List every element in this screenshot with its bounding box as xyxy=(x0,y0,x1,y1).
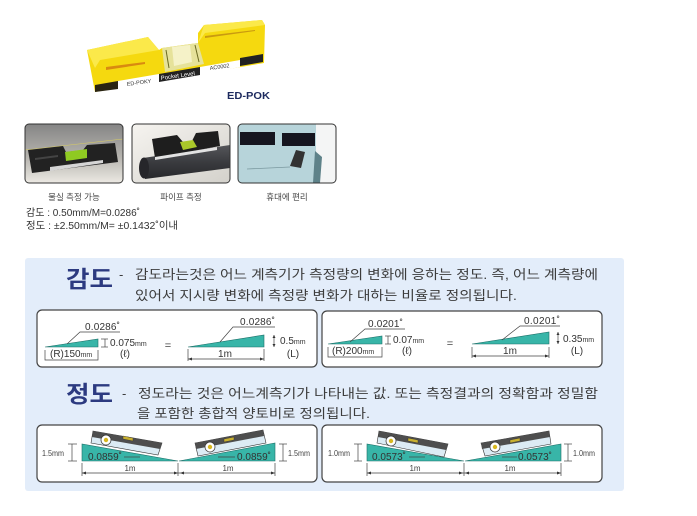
diagram: sensitivity 0.0286: 1m xyxy=(218,349,232,360)
diagram: sensitivity 0.0286: 0.0286˚ xyxy=(85,321,120,333)
diagram: sensitivity 0.0201: 0.35mm xyxy=(563,334,594,345)
diagram: sensitivity 0.0201: 0.07mm xyxy=(393,335,424,346)
photo caption: portable: 휴대에 편리 xyxy=(266,192,308,202)
spec: sensitivity: 감도 : 0.50mm/M=0.0286˚ xyxy=(26,207,140,219)
photo caption: pipe: 파이프 측정 xyxy=(160,192,202,202)
diagram: sensitivity 0.0286: (R)150mm xyxy=(50,349,92,360)
spec: accuracy: 정도 : ±2.50mm/M= ±0.1432˚이내 xyxy=(26,220,178,232)
diagram: sensitivity 0.0201: 0.0201˚ xyxy=(524,315,560,327)
diagram: accuracy 1.5mm: 1m xyxy=(222,464,234,473)
photo: carried in belt pocket xyxy=(238,124,336,183)
photo caption: surface: 물실 측정 가능 xyxy=(48,192,100,202)
product photo: yellow pocket level: ED-POKY xyxy=(126,79,152,88)
diagram: accuracy 1.0mm: 1m xyxy=(409,464,421,473)
heading: sensitivity: 감도 xyxy=(66,266,113,292)
heading: accuracy: 정도 xyxy=(66,381,113,407)
diagram: sensitivity 0.0201: (ℓ) xyxy=(402,346,412,357)
text block: sensitivity definition: 있어서 지시량 변화에 측정량 변화가 대하는 비율로 정의됩니다. xyxy=(135,288,517,303)
diagram: sensitivity 0.0201: 0.0201˚ xyxy=(368,318,403,330)
diagram: accuracy 1.5mm: 1m xyxy=(124,464,136,473)
diagram: accuracy 1.5mm: 0.0859˚ xyxy=(88,451,122,463)
diagram: accuracy 1.0mm: 0.0573˚ xyxy=(518,451,552,463)
diagram: accuracy 1.0mm: 1.0mm xyxy=(573,449,595,458)
diagram: accuracy 1.5mm: 0.0859˚ xyxy=(237,451,271,463)
diagram: sensitivity 0.0286: 0.0286˚ xyxy=(240,316,275,328)
diagram: accuracy 1.0mm: 1m xyxy=(504,464,516,473)
diagram: sensitivity 0.0286: 0.075mm xyxy=(110,338,147,349)
text block: sensitivity definition: 감도라는것은 어느 계측기가 측정량의 변화에 응하는 정도. 즉, 어느 계측량에 xyxy=(135,267,598,282)
text block: accuracy definition: - xyxy=(122,386,126,401)
diagram: sensitivity 0.0201 xyxy=(322,311,602,367)
text block: accuracy definition xyxy=(122,386,598,421)
text block: accuracy definition: 정도라는 것은 어느계측기가 나타내는 값. 또는 측정결과의 정확함과 정밀함 xyxy=(138,386,598,401)
diagram: accuracy 1.0mm: 1.0mm xyxy=(328,449,350,458)
diagram: accuracy 1.5mm xyxy=(37,425,317,482)
product photo: yellow pocket level: Pocket Level xyxy=(160,71,195,82)
diagram: sensitivity 0.0286: 0.5mm xyxy=(280,336,306,347)
photo: pipe measurement xyxy=(132,124,230,183)
panel: definitions xyxy=(25,258,624,491)
photo: surface measurement xyxy=(25,124,123,183)
diagram: sensitivity 0.0201: (R)200mm xyxy=(332,346,374,357)
product photo: yellow pocket level xyxy=(87,20,265,92)
diagram: sensitivity 0.0286: (L) xyxy=(287,349,299,360)
diagram: sensitivity 0.0201: = xyxy=(447,338,453,350)
text block: accuracy definition: 을 포함한 총합적 양토비로 정의됩니다. xyxy=(137,406,370,421)
text block: sensitivity definition: - xyxy=(119,267,123,282)
diagram: sensitivity 0.0286: = xyxy=(165,340,171,352)
text block: sensitivity definition xyxy=(119,267,598,303)
product photo: yellow pocket level: AC0002 xyxy=(209,63,230,72)
diagram: sensitivity 0.0286: (ℓ) xyxy=(120,349,130,360)
diagram: accuracy 1.0mm xyxy=(322,425,602,482)
diagram: accuracy 1.5mm: 1.5mm xyxy=(42,449,64,458)
diagram: accuracy 1.5mm: 1.5mm xyxy=(288,449,310,458)
diagram: sensitivity 0.0201: 1m xyxy=(503,346,517,357)
product code label: ED-POK xyxy=(227,90,270,102)
diagram: sensitivity 0.0201: (L) xyxy=(571,346,583,357)
diagram: sensitivity 0.0286 xyxy=(37,310,317,367)
diagram: accuracy 1.0mm: 0.0573˚ xyxy=(372,451,406,463)
